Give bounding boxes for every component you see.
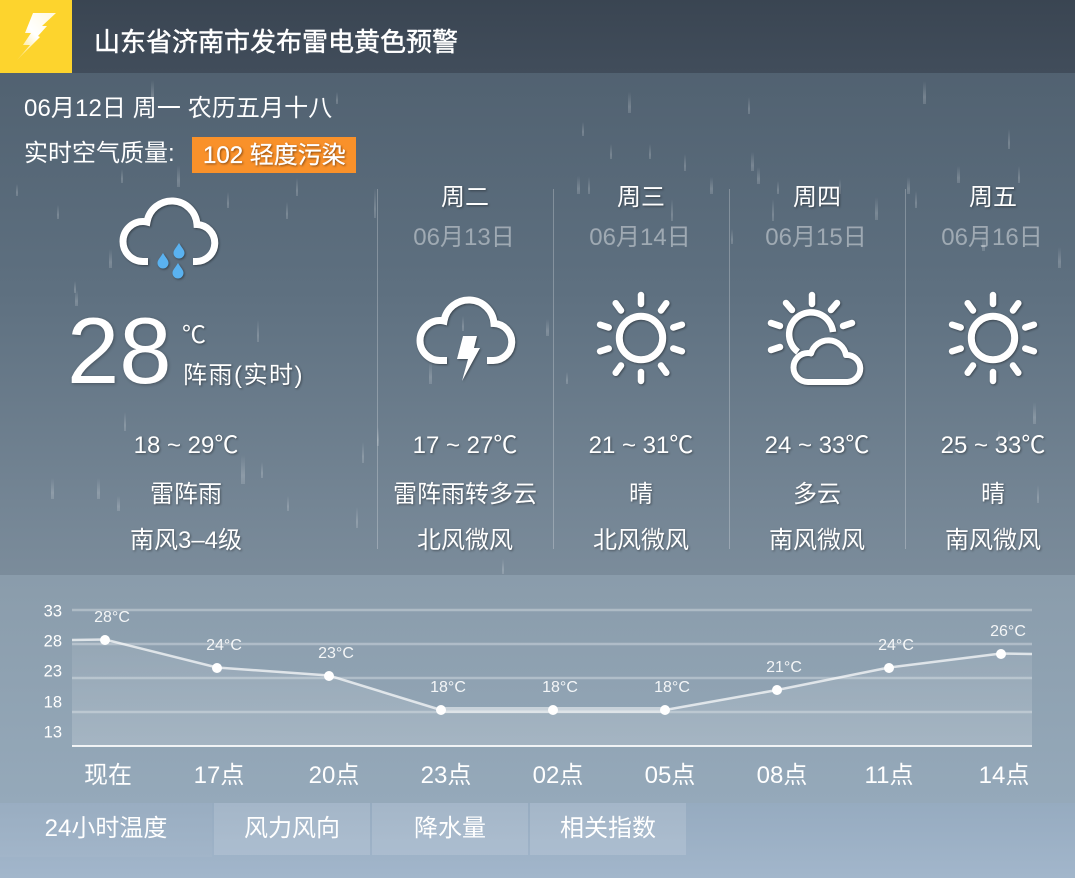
line chart: 24 hour temperature: 26°C: [990, 623, 1026, 640]
temperature range: 24 ~ 33℃: [765, 432, 869, 459]
date: 06月16日: [941, 224, 1043, 251]
line chart: 24 hour temperature: 18°C: [654, 679, 690, 696]
column separator: [905, 189, 906, 549]
line chart: 24 hour temperature: 24°C: [206, 637, 242, 654]
icon: sun behind cloud: [768, 292, 866, 387]
today temperature range: 18 ~ 29℃: [134, 432, 238, 459]
line chart: 24 hour temperature: 21°C: [766, 659, 802, 676]
line chart: 24 hour temperature: 18°C: [430, 679, 466, 696]
x axis hour labels: 17点: [194, 762, 244, 789]
today forecast: [130, 432, 242, 554]
x axis hour labels: 14点: [979, 762, 1029, 789]
icon: cloud with rain: [120, 198, 220, 280]
weekday: 周三: [617, 184, 665, 211]
line chart: 24 hour temperature: 28: [44, 632, 62, 650]
line chart: 24 hour temperature: 13: [44, 724, 62, 742]
temperature range: 21 ~ 31℃: [589, 432, 693, 459]
line chart: 24 hour temperature: 28°C: [94, 609, 130, 626]
celsius unit: ℃: [182, 322, 206, 349]
date: 06月15日: [765, 224, 867, 251]
tab: 24 hour temperature (active): 24小时温度: [45, 815, 167, 842]
temperature range: 25 ~ 33℃: [941, 432, 1045, 459]
icon: sun: [948, 292, 1039, 386]
x axis hour labels: 现在: [84, 762, 132, 789]
line chart: 24 hour temperature: 23: [44, 662, 62, 680]
line chart: 24 hour temperature: 33: [44, 602, 62, 620]
x axis hour labels: 08点: [757, 762, 807, 789]
line chart: 24 hour temperature: 18°C: [542, 679, 578, 696]
wind: 南风微风: [945, 527, 1041, 554]
alert title: 山东省济南市发布雷电黄色预警: [94, 27, 458, 57]
weather: 多云: [793, 481, 841, 508]
air quality badge: 102 轻度污染: [203, 142, 346, 169]
today weather: 雷阵雨: [150, 481, 222, 508]
icon: sun: [596, 292, 687, 386]
wind: 北风微风: [417, 527, 513, 554]
temperature range: 17 ~ 27℃: [413, 432, 517, 459]
column separator: [729, 189, 730, 549]
rain streaks background: [16, 84, 1061, 574]
weather: 雷阵雨转多云: [393, 481, 537, 508]
x axis hour labels: 23点: [421, 762, 471, 789]
date line: 06月12日 周一 农历五月十八: [24, 95, 332, 122]
x axis hour labels: 20点: [309, 762, 359, 789]
current temperature: 28: [67, 298, 172, 403]
panel: 24 hour chart: [0, 575, 1075, 803]
column separator: [377, 189, 378, 549]
weather: 晴: [629, 481, 653, 508]
x axis hour labels: 02点: [533, 762, 583, 789]
today wind: 南风3–4级: [130, 527, 242, 554]
icon: thunder cloud: [416, 296, 518, 381]
line chart: 24 hour temperature: 24°C: [878, 637, 914, 654]
x axis hour labels: 05点: [645, 762, 695, 789]
alert banner: [0, 0, 1075, 73]
icon: lightning alert: [0, 0, 72, 73]
current condition: 阵雨(实时): [183, 362, 304, 389]
weather: 晴: [981, 481, 1005, 508]
tab: indices: 相关指数: [560, 815, 656, 842]
tab: wind: 风力风向: [244, 815, 340, 842]
date: 06月14日: [589, 224, 691, 251]
date: 06月13日: [413, 224, 515, 251]
tab: precipitation: [372, 803, 528, 855]
forecast: Tuesday: [104, 184, 864, 636]
x axis hour labels: 11点: [865, 762, 913, 789]
weekday: 周四: [793, 184, 841, 211]
column separator: [553, 189, 554, 549]
tab: 24 hour temperature (active): [0, 803, 212, 857]
air quality badge: [192, 137, 356, 173]
air quality label: 实时空气质量:: [24, 140, 175, 167]
line chart: 24 hour temperature: 18: [44, 694, 62, 712]
weekday: 周二: [441, 184, 489, 211]
weekday: 周五: [969, 184, 1017, 211]
forecast: Wednesday: [104, 184, 864, 636]
wind: 北风微风: [593, 527, 689, 554]
tab: wind: [214, 803, 370, 855]
tab: indices: [530, 803, 686, 855]
forecast: Friday: [104, 184, 1046, 636]
tab: precipitation: 降水量: [414, 815, 486, 842]
line chart: 24 hour temperature: 23°C: [318, 645, 354, 662]
wind: 南风微风: [769, 527, 865, 554]
forecast: Thursday: [104, 184, 870, 636]
